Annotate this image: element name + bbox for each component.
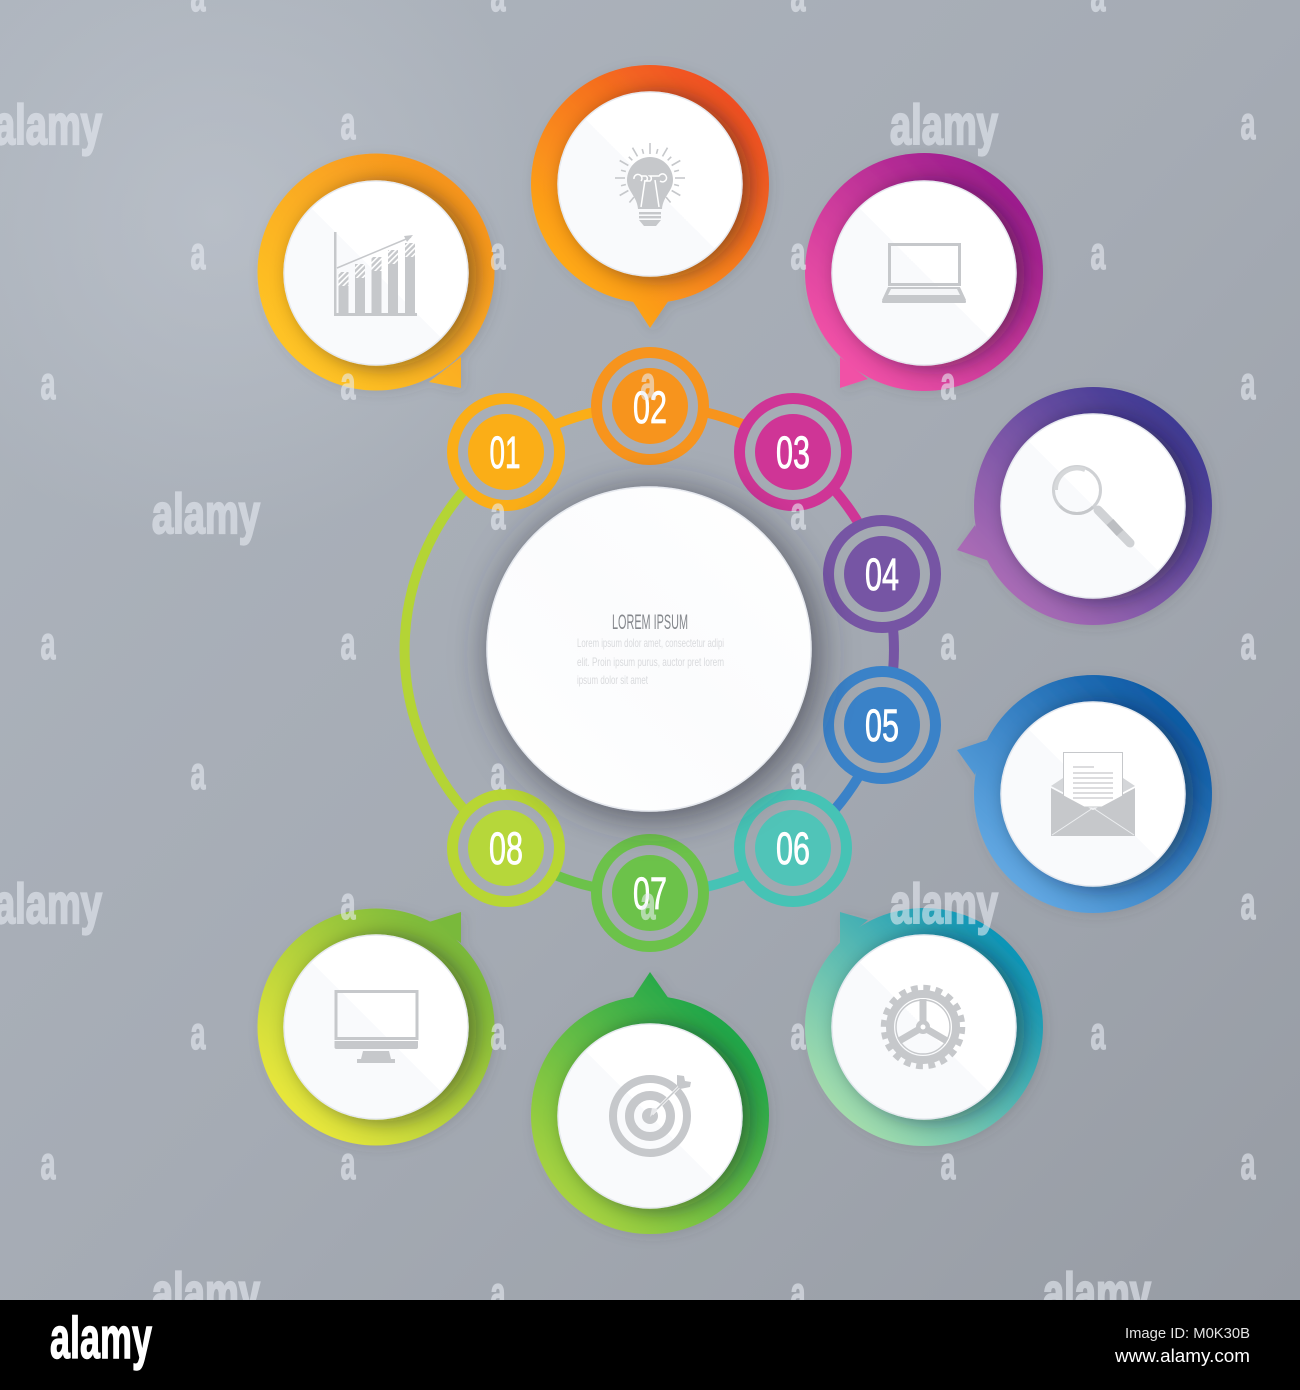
text block: description: ipsum dolor sit amet [577,673,648,687]
watermark: repeated alamy marks: a [1240,877,1256,929]
panel: bubble 2 with light bulb [531,65,769,328]
icon: desktop monitor [334,992,418,1063]
node 05: 05 [865,700,899,751]
watermark: repeated alamy marks: a [1240,357,1256,409]
node 03: 03 [776,427,810,478]
watermark: repeated alamy marks: alamy [890,93,998,156]
node 07 [596,840,704,946]
watermark: repeated alamy marks: a [1090,1007,1106,1059]
watermark: repeated alamy marks: a [940,617,956,669]
watermark: repeated alamy marks: a [490,747,506,799]
watermark: repeated alamy marks: a [790,1007,806,1059]
node 08 [452,794,560,902]
node 06 [740,794,846,902]
icon: light bulb [615,143,685,226]
node 06: 06 [776,823,810,874]
watermark: repeated alamy marks: a [490,1267,506,1319]
icon: laptop [882,244,966,303]
panel: bubble 4 with magnifier [957,387,1212,625]
watermark: repeated alamy marks: a [190,227,206,279]
node 07: 07 [633,868,667,919]
watermark: repeated alamy marks: alamy [152,1261,260,1324]
watermark: repeated alamy marks: a [490,227,506,279]
connecting ring of arcs [405,406,894,893]
watermark: repeated alamy marks: a [1240,617,1256,669]
watermark: repeated alamy marks: a [340,357,356,409]
node 04 [828,520,936,628]
text block: description [577,636,724,687]
panel: bubble 5 with envelope [957,675,1212,913]
icon: envelope with letter [1051,752,1135,836]
panel: bubble 1 with chart [258,154,494,390]
watermark: repeated alamy marks: a [790,747,806,799]
icon: magnifying glass [1054,466,1130,543]
watermark: repeated alamy marks: a [790,227,806,279]
watermark: repeated alamy marks: a [790,487,806,539]
footer bar [0,1300,1300,1390]
watermark: repeated alamy marks: a [340,1137,356,1189]
watermark: repeated alamy marks: a [340,877,356,929]
node 04: 04 [865,549,899,600]
panel: bubble 3 with laptop [805,153,1043,391]
watermark: repeated alamy marks: a [940,1137,956,1189]
watermark: repeated alamy marks: a [1090,227,1106,279]
watermark: repeated alamy marks: a [1240,97,1256,149]
panel: bubble 7 with target [531,972,769,1234]
node 02 [596,352,704,460]
watermark: repeated alamy marks: alamy [1043,1261,1151,1324]
watermark: repeated alamy marks: a [490,487,506,539]
footer logo: alamy [50,1306,152,1371]
watermark: repeated alamy marks: a [1240,1137,1256,1189]
watermark: repeated alamy marks: a [190,1007,206,1059]
heading: lorem ipsum: LOREM IPSUM [612,611,688,634]
watermark: repeated alamy marks: a [790,1267,806,1319]
watermark: repeated alamy marks: a [40,617,56,669]
icon: gear [885,989,961,1065]
watermark: repeated alamy marks: a [40,357,56,409]
icon: bar chart [334,232,417,316]
watermark: repeated alamy marks: a [490,1007,506,1059]
watermark: repeated alamy marks: alamy [152,482,260,545]
node 03 [740,398,846,506]
panel: central disc [487,487,811,811]
icon: target with arrow [613,1075,691,1153]
watermark: repeated alamy marks: a [940,357,956,409]
text block: description: Lorem ipsum dolor amet, consectetur adipi [577,636,724,650]
watermark: repeated alamy marks: a [190,747,206,799]
watermark: repeated alamy marks: a [640,877,656,929]
node 01 [452,398,560,506]
watermark: repeated alamy marks: a [340,617,356,669]
node 02: 02 [633,382,667,433]
node 05 [828,672,936,778]
node 01: 01 [490,427,520,478]
watermark: repeated alamy marks: a [40,1137,56,1189]
watermark: repeated alamy marks: a [640,357,656,409]
panel: bubble 8 with monitor [258,908,494,1146]
watermark: repeated alamy marks: a [340,97,356,149]
text block: description: elit. Proin ipsum purus, auctor pret lorem [577,655,724,669]
footer image id: Image ID: M0K30B [1125,1325,1250,1342]
footer website: www.alamy.com [1114,1346,1250,1366]
watermark: repeated alamy marks: alamy [890,872,998,935]
node 08: 08 [489,823,523,874]
panel: bubble 6 with gear [805,908,1043,1146]
